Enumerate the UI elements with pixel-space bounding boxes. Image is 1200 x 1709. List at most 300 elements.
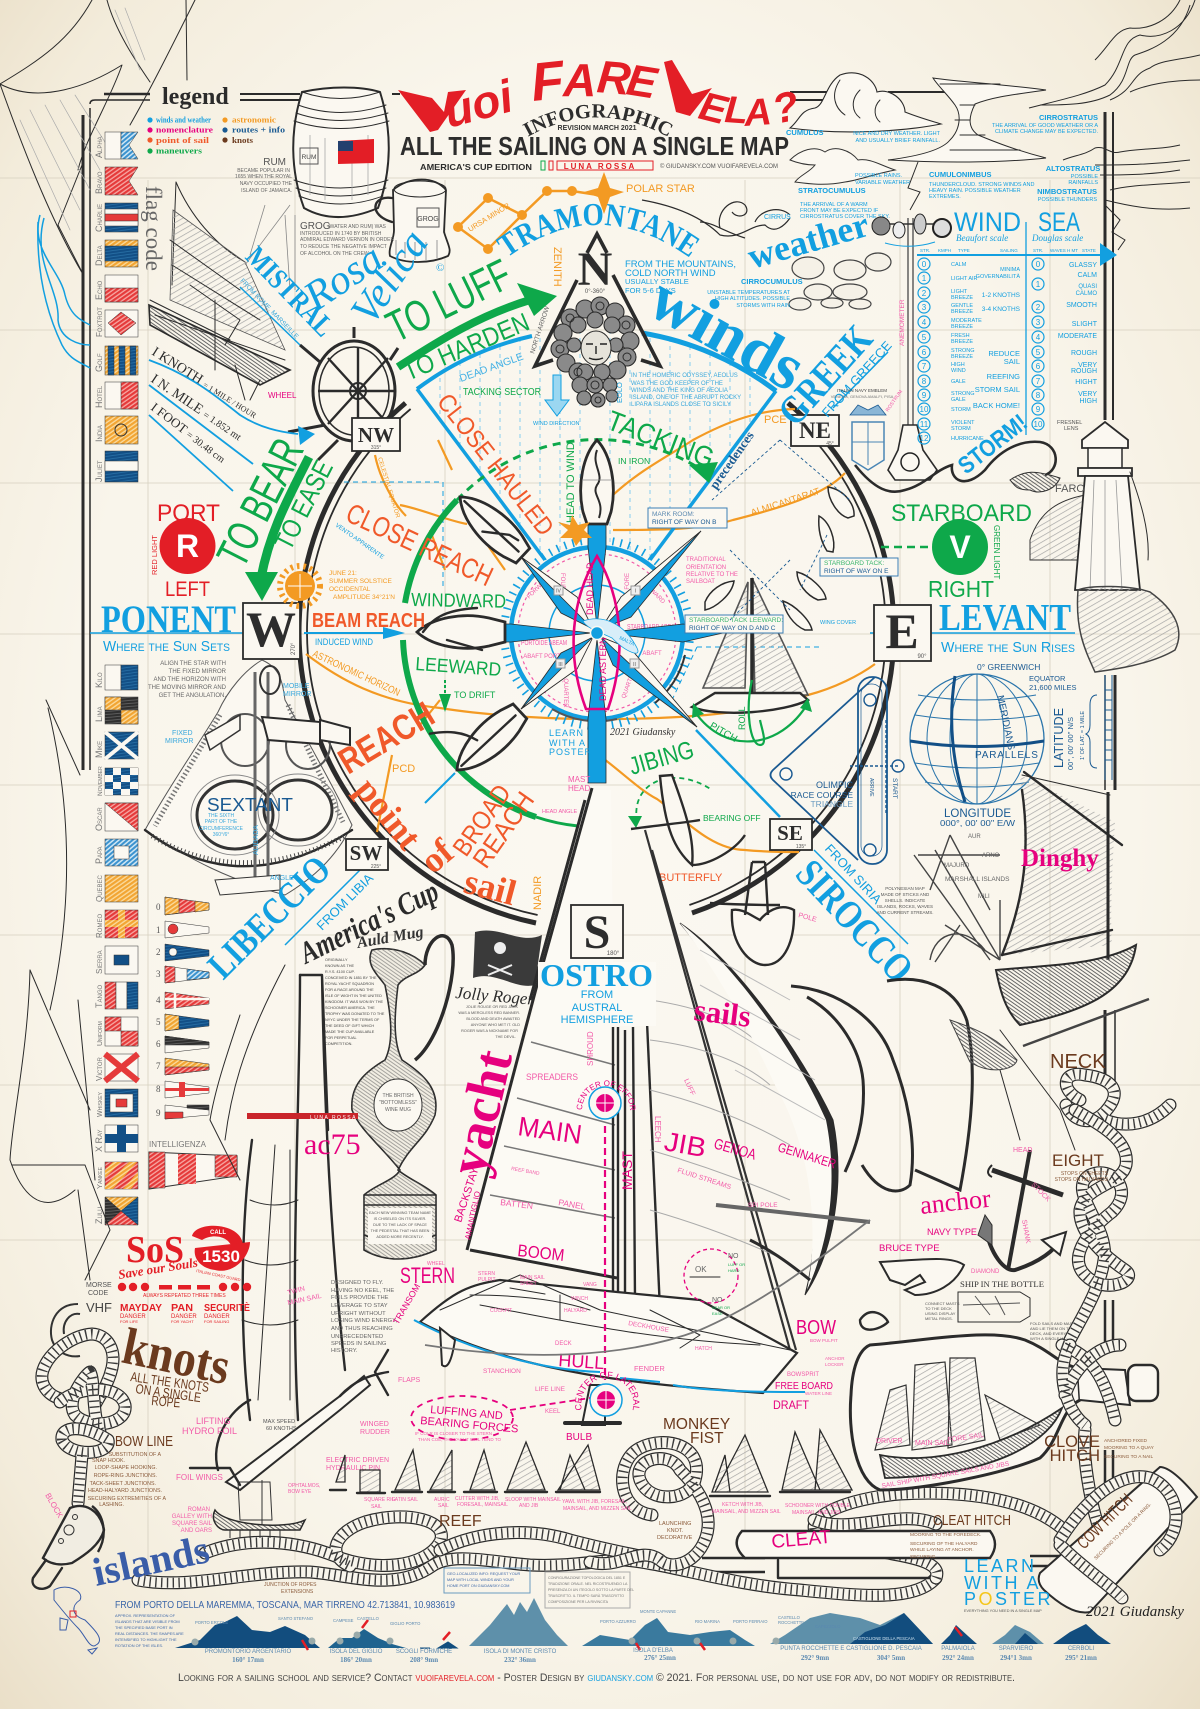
yacht part labels: DECKHOUSE (628, 1320, 670, 1334)
ac75 labels: HYDRO FOIL (182, 1426, 237, 1436)
table numbers: 2 (922, 289, 927, 298)
globe labels: 00°, 00' 00" N/S (1066, 717, 1075, 770)
title block: INFOGRAPHIC (522, 104, 673, 136)
fluid streams ok detail: BEAR OR (712, 1305, 730, 1310)
illustration: flag code sailboat (149, 182, 295, 400)
small labels: CAMPESE (333, 1618, 354, 1623)
ac75 description (331, 1280, 397, 1354)
starboard light (881, 500, 1032, 602)
table numbers: 5 (922, 333, 927, 342)
cardinal southwest: SW (350, 841, 382, 865)
sailing rig types (336, 1430, 852, 1492)
sextant label: SEXTANT (207, 795, 293, 815)
reach: REACH (331, 693, 441, 782)
boat A (819, 516, 834, 552)
rose ticks and rings (504, 540, 690, 726)
outer sailing circle (299, 403, 894, 923)
solstice note (329, 570, 395, 601)
globe labels: LATITUDE (1051, 708, 1066, 768)
fluid streams ok detail: OK (695, 1265, 707, 1274)
sextant part labels: MIRROR (165, 738, 193, 745)
neck stopper rope (1066, 1074, 1170, 1124)
island name captions: ISOLA D'ELBA (633, 1648, 673, 1654)
spinnaker curves (807, 997, 864, 1172)
anchor labels (971, 1147, 1052, 1275)
clove hitch label: SECURING TO A NAIL (1104, 1454, 1153, 1460)
north arrow label: NORTH ARROW (529, 305, 551, 355)
emergency calls: MAYDAY (120, 1303, 162, 1314)
yacht major labels: JIB (662, 1126, 709, 1163)
boat E (783, 601, 812, 630)
dashed centre line (604, 1126, 606, 1380)
learn with a poster small: POSTER (549, 747, 592, 757)
cleat (737, 1527, 995, 1578)
monkey fist label (663, 1416, 730, 1447)
island name captions: PROMONTORIO ARGENTARIO (205, 1649, 292, 1655)
small labels: ROCCHETTE (778, 1620, 804, 1625)
flag names A-J: Delta (94, 245, 104, 266)
rudder and keel (440, 1328, 605, 1425)
cardinal northeast: NE (799, 418, 831, 443)
beaufort types: HIGH (951, 362, 965, 368)
yacht part labels: SPI POLE (748, 1202, 778, 1209)
reef upper right strand (440, 1533, 640, 1556)
map labels (944, 834, 1010, 900)
flag names A-J: Golf (94, 353, 104, 372)
all the knots subtitle: ALL THE KNOTS (130, 1369, 210, 1395)
island bearings: 232° 36mn (504, 1656, 536, 1664)
ponent wind: PONENT (101, 598, 236, 641)
tramontane description: FOR 5-6 DAYS (625, 286, 676, 295)
island: elba (582, 1618, 755, 1646)
morse label: MORSE (86, 1282, 112, 1289)
cloud labels: HIGH ALTITUDES. POSSIBLE (715, 296, 790, 302)
italy outline (54, 1587, 100, 1654)
rig labels: AURIC (434, 1497, 450, 1503)
pitch and roll arrows: ROLL (737, 706, 747, 730)
winds heading: winds (638, 261, 817, 405)
polar star and ursa minor (453, 172, 695, 254)
yacht part labels: WINCH (571, 1296, 588, 1302)
pennant 3 (165, 966, 209, 983)
ac75 labels: MAIN SAIL (287, 1293, 322, 1307)
ac75 labels: MAX SPEED (263, 1419, 295, 1425)
yacht part labels: SHROUD (586, 1031, 595, 1066)
rum text: BECAME POPULAR IN (237, 168, 290, 174)
table headers: SAILING (1000, 248, 1018, 253)
pennant numbers: 6 (156, 1039, 161, 1049)
roman numeral markers: II (633, 662, 636, 668)
pennant 1 (165, 921, 209, 938)
solstice note: JUNE 21: (329, 570, 357, 577)
luna rossa boom stripe (247, 1113, 358, 1121)
globe labels: 1' OF LAT. = 1 MILE (1080, 711, 1086, 760)
cloud labels: STRATOCUMULUS (798, 186, 866, 195)
bowline rope (42, 1334, 113, 1405)
yacht part labels: WHEEL (427, 1261, 445, 1267)
cardinal east: 90° (917, 654, 927, 660)
approx text: REAL DISTANCES. THE SHAPES ARE (115, 1631, 184, 1636)
america's cup history text: MADE THE CUP AVAILABLE (325, 1030, 375, 1034)
to drift arrow: TO DRIFT (454, 690, 496, 700)
vhf label: VHF (86, 1300, 112, 1315)
title lettering: ? (768, 81, 803, 133)
dead angle labels (458, 351, 541, 398)
cloud labels: CIRROSTRATUS COVER THE SKY. (800, 214, 890, 220)
bowline heading and text: SUBSTITUTION OF A (109, 1452, 161, 1458)
title flag letter V right (664, 60, 712, 116)
mistral wind: FROM ROME, MARSEILLE (239, 278, 300, 341)
luffing and bearing forces: THAN COE, THE YACHT WILL TEND TO (418, 1437, 502, 1442)
flag whiskey (105, 1089, 138, 1117)
fluid streams ok detail (684, 1249, 745, 1316)
title lettering: R (595, 50, 633, 105)
yacht major labels: AMANTIGLIO (463, 1190, 482, 1240)
cloud labels: AND USUALLY BRIEF RAINFALL. (856, 138, 940, 144)
table numbers: 6 (1036, 362, 1041, 371)
S cardinal box (571, 905, 623, 959)
solstice note: AMPLITUDE 34°21'N (333, 593, 395, 601)
cardinal northwest (352, 418, 400, 451)
rum text: ISLAND OF JAMAICA. (241, 188, 292, 194)
pink sector labels: STARBOARD ABEAM (627, 624, 679, 631)
island: punta rocchette (770, 1613, 933, 1644)
wind direction arrow (533, 375, 579, 427)
beaufort types: GALE (951, 379, 966, 385)
legend items: point of sail (156, 135, 210, 145)
jolly roger caption: ROGER WAS A NICKNAME FOR (461, 1029, 518, 1033)
ac75 description: SPEEDS IN SAILING (331, 1341, 387, 1347)
map labels: MARSHALL ISLANDS (945, 876, 1010, 883)
cloud labels: CUMULONIMBUS (929, 170, 992, 179)
island bearings: 304° 5mn (877, 1654, 905, 1662)
ac75 labels: ELECTRIC DRIVEN (326, 1457, 389, 1464)
pitch and roll arrows (692, 680, 812, 745)
pink sector labels: FORWARD (640, 579, 666, 606)
yacht major labels: GENOA (712, 1136, 758, 1164)
starboard tack box: STARBOARD TACK: (824, 560, 885, 567)
starboard tack leeward box (685, 615, 783, 633)
cardinal southeast: 135° (796, 844, 806, 850)
astronomic orange curves (306, 409, 875, 852)
mast head labels: MAST (568, 775, 590, 784)
eolo description: WINDS AND THE KING OF AEOLIA (631, 388, 728, 394)
rum label: RUM (302, 154, 316, 161)
rig: cutter (470, 1450, 495, 1490)
polynesian caption: MADE OF STICKS AND (881, 892, 930, 897)
table numbers: 3 (1036, 318, 1041, 327)
rosa velica lettering (295, 222, 444, 333)
ship sail labels: SAIL SHIP WITH SQUARE SAILS AND JIBS (881, 1461, 1010, 1490)
greek wind: FROM GREECE (819, 338, 895, 420)
starboard tack box (820, 558, 898, 576)
cloud labels: NIMBOSTRATUS (1037, 187, 1097, 196)
flag code column A-J (94, 132, 138, 482)
flag names K-Z: Uniform (97, 1021, 104, 1046)
save our souls: Save our Souls (117, 1255, 199, 1282)
ship in the bottle small diagram: WITH A SINGLE WIRE (1030, 1336, 1071, 1341)
boat B (828, 487, 854, 518)
america's cup history text: FOR PERPETUAL (325, 1036, 357, 1040)
wheel and mile notes (148, 327, 398, 491)
jolly roger flag (455, 930, 542, 1039)
bowline heading and text: TACK-SHEET JUNCTIONS. (90, 1481, 156, 1487)
flag names K-Z: X Ray (94, 1129, 104, 1152)
running: RUNNING (588, 814, 611, 916)
ship in the bottle small diagram: FOLD SAILS AND MASTS (1030, 1321, 1078, 1326)
shackle (860, 1312, 888, 1330)
pennant 5 (165, 1014, 209, 1031)
cardinal northwest: 315° (371, 445, 381, 451)
fresnel lens label: LENS (1064, 426, 1079, 432)
island bearings: 186° 20mn (340, 1656, 372, 1664)
beaufort types: VIOLENT (951, 420, 975, 426)
beaufort types: HURRICANE (951, 436, 984, 442)
ostro wind: FROM (581, 989, 613, 1001)
bowline heading and text: SNAP HOOK. (92, 1458, 125, 1464)
island bearings: 294°1 3mn (1000, 1654, 1032, 1662)
weather heading: weather (743, 204, 873, 277)
rig labels: MAINSAIL, AND MIZZEN SAIL (563, 1506, 632, 1512)
vhf ring (51, 1304, 80, 1356)
flag names K-Z: Lima (94, 706, 104, 722)
beam reach: BEAM REACH (312, 610, 425, 632)
nadir: NADIR (532, 876, 544, 910)
contact note box: MAP WITH LOCAL WINDS AND YOUR (447, 1578, 514, 1582)
center of lateral resistance label (581, 1378, 633, 1412)
learn with a poster logo (964, 1556, 1053, 1613)
contact note box: HOME PORT ON GIUDANSKY.COM (447, 1584, 509, 1588)
spinnaker pole (716, 1205, 870, 1222)
scale names: Beaufort scale (956, 233, 1008, 243)
america's cup history text: ISLE OF WIGHT IN THE UNITED (325, 994, 382, 998)
polynesian map (914, 834, 1010, 962)
port light: RED LIGHT (150, 535, 159, 575)
beaufort types: LIGHT (951, 289, 968, 295)
small text precedences: precedences (706, 428, 757, 492)
cleat hitch rope (814, 1493, 1064, 1578)
pennant numbers: 2 (156, 947, 160, 957)
main yacht sail plan: CENTER OF EFFORT (576, 1080, 636, 1110)
compass rose (504, 521, 732, 783)
center of effort label (582, 1086, 630, 1110)
cloud labels: POSSIBLE (1071, 174, 1098, 180)
anchor labels: SHANK (1020, 1219, 1031, 1244)
ac75 racing yacht (176, 975, 421, 1490)
small labels: PORTO ERCOLE (195, 1620, 228, 1625)
luffing and bearing forces: LUFFING AND (430, 1404, 503, 1422)
trophy caption (379, 1093, 417, 1113)
cardinal east (874, 603, 931, 661)
table numbers: 9 (922, 391, 927, 400)
jolly roger title: Jolly Roger (455, 983, 535, 1009)
flag names A-J: India (94, 425, 104, 442)
flag names A-J: Hotel (94, 385, 104, 408)
flag names A-J: Foxtrot (95, 307, 104, 337)
rosa velica lettering: © (436, 262, 444, 274)
pink sector labels: FORWARD (526, 574, 553, 600)
table headers: STATE (1082, 248, 1096, 253)
grog text: (WATER AND RUM) WAS (328, 224, 387, 230)
yacht part labels: LEECH (653, 1116, 662, 1143)
america's cup history text: ROYAL YACHT SQUADRON (325, 982, 374, 986)
sea states: SLIGHT (1072, 321, 1098, 328)
leeward: LEEWARD (415, 654, 502, 681)
layline dashed routes (712, 440, 850, 620)
jibing block: BEARING OFF (703, 813, 761, 823)
emergency notes: DANGER (171, 1314, 197, 1320)
solstice note: SUMMER SOLSTICE (329, 578, 393, 585)
yacht major labels: STERN (400, 1263, 455, 1288)
roman galley: BOW EYE (288, 1489, 312, 1495)
flag papa (105, 839, 138, 866)
port light: R (176, 528, 199, 564)
table numbers: 1 (1036, 280, 1041, 289)
cloud labels: CIRROSTRATUS (1039, 113, 1098, 122)
yacht part labels: FENDER (634, 1364, 665, 1373)
yacht major labels: BULB (566, 1432, 592, 1443)
learn with a poster logo: LEARN (964, 1556, 1037, 1576)
dead head and dead astern labels: DEAD ASTERN (598, 637, 608, 701)
rig labels: SQUARE RIG (364, 1497, 396, 1503)
beaufort types: STORM (951, 407, 971, 413)
table headers: STR. (1033, 248, 1043, 253)
sextant caption: CIRCUMFERENCE (199, 826, 244, 832)
table numbers: 2 (1036, 303, 1041, 312)
ship in the bottle small diagram: AND LIE THEM ON THE (1030, 1326, 1074, 1331)
globe labels (940, 662, 1086, 828)
beaufort types: BREEZE (951, 309, 973, 315)
greek wind: GREEK (769, 316, 881, 434)
wind heading: WIND (954, 207, 1021, 237)
cloud labels: THE ARRIVAL OF A WARM (800, 202, 868, 208)
ostro wind: HEMISPHERE (561, 1014, 633, 1026)
tramontane description: USUALLY STABLE (625, 277, 689, 286)
map labels: MILI (978, 894, 990, 900)
table numbers (920, 260, 1043, 443)
flag names A-J: Bravo (94, 171, 104, 194)
yacht major labels: BOOM (517, 1241, 565, 1265)
eight knot rope (1070, 1110, 1129, 1340)
launching knot note (657, 1521, 693, 1541)
yacht major labels (391, 1111, 838, 1443)
anchor labels: STOCK (1030, 1181, 1052, 1204)
table numbers: 1 (922, 274, 927, 283)
sheet rope lines (425, 1220, 870, 1355)
blue induced wind arrow (304, 627, 405, 639)
learn with a poster logo: POSTER (964, 1589, 1053, 1609)
title lettering: F (528, 50, 569, 113)
globe labels: EQUATOR (1029, 674, 1066, 683)
cow hitch rope (1060, 1477, 1176, 1598)
ship wheel (288, 327, 398, 460)
flag golf (105, 346, 138, 375)
mast head labels (542, 775, 590, 815)
north cardinal letter: 0°-360° (585, 289, 606, 295)
storm lettering: STORM! (953, 409, 1033, 480)
table numbers: 11 (920, 420, 929, 429)
sailing advice: GOVERNABILITÀ (976, 273, 1020, 280)
map labels: ARNO (982, 853, 1000, 859)
fresnel lens label (1057, 420, 1082, 432)
polynesian caption: POLYNESIAN MAP (885, 886, 925, 891)
sextant part labels: MOBILE (283, 683, 310, 690)
emergency notes: DANGER (204, 1314, 230, 1320)
america's cup history text: CONCEIVED IN 1851 BY THE (325, 976, 377, 980)
cleat label: CLEAT (771, 1527, 832, 1553)
flag sierra (105, 946, 138, 974)
sailboat northwest close hauled (449, 485, 534, 568)
america's cup history text: COMPETITION. (325, 1042, 352, 1046)
flag names K-Z: November (97, 766, 104, 796)
flag kilo (105, 665, 138, 690)
sextant part labels: MIRROR (283, 691, 311, 698)
flag lima (105, 697, 138, 724)
illustration: top-left ship sails (0, 0, 195, 276)
starboard tack leeward box: RIGHT OF WAY ON D AND C (689, 625, 776, 632)
island name captions: ISOLA DEL GIGLIO (330, 1649, 383, 1655)
navy type: NAVY TYPE (927, 1227, 977, 1238)
beaufort types: STORM (951, 426, 971, 432)
beaufort types: BREEZE (951, 324, 973, 330)
in iron label: IN IRON (618, 456, 650, 466)
table numbers: 4 (1036, 333, 1041, 342)
ship in the bottle small diagram: CONNECT MASTS (925, 1301, 960, 1306)
beaufort types: MODERATE (951, 318, 982, 324)
yacht part labels: COCKPIT (490, 1308, 512, 1314)
luna rossa boom stripe: LUNA ROSSA (310, 1115, 357, 1121)
pink sector labels: QUARTER (562, 678, 568, 708)
flag names A-J (94, 136, 104, 482)
cloud labels: HEAVY RAIN. POSSIBLE WEATHER (929, 188, 1021, 194)
sailing advice: 3-4 KNOTHS (982, 306, 1021, 313)
tacking lettering: TACKING (603, 405, 719, 474)
ac75 description: UPRIGHT WITHOUT (331, 1311, 386, 1317)
emergency notes: DANGER (120, 1314, 146, 1320)
ship in the bottle small diagram: DECK, AND EVERYTHING (1030, 1331, 1079, 1336)
sea states: VERY (1078, 362, 1097, 369)
dead angle labels: DEAD ANGLE (458, 351, 525, 385)
pennant numbers: 0 (156, 902, 161, 912)
island name captions: PUNTA ROCCHETTE E CASTIGLIONE D. PESCAIA (780, 1646, 922, 1652)
clove hitch label: ANCHORED FIXED (1104, 1438, 1147, 1444)
fluid streams ok detail: HARD (728, 1268, 739, 1273)
legend items: maneuvers (156, 146, 203, 156)
all the knots subtitle: ON A SINGLE (135, 1381, 202, 1405)
wind and sea table (917, 207, 1117, 444)
butterfly boat upper (631, 775, 745, 865)
pink sector labels: ABAFT (642, 651, 662, 657)
ac75 labels: 60 KNOTHS (266, 1426, 297, 1432)
flag names A-J: Echo (94, 280, 104, 300)
eight knot label: STOPS ON HALYARDS (1055, 1177, 1109, 1183)
illustration: sextant (145, 660, 352, 895)
emergency notes: FOR YACHT (171, 1319, 194, 1324)
flag code heading: flag code (141, 186, 166, 271)
reef note: JUNCTION OF ROPES (264, 1582, 317, 1588)
broad reach: BROAD (446, 779, 517, 861)
ship sail labels (876, 1432, 1010, 1490)
pitch and roll arrows: PITCH (708, 721, 739, 745)
title lettering: L (723, 89, 749, 133)
eolo description: IN THE HOMERIC ODYSSEY, AEOLUS (631, 373, 738, 379)
head to wind label: HEAD TO WIND (565, 442, 577, 523)
coast guard phone icon: ITALIAN COAST GUARD (196, 1268, 241, 1282)
rig labels: LATIN SAIL (392, 1497, 418, 1503)
cleat hitch label: MOORING TO THE FOREDECK. (910, 1532, 981, 1538)
america's cup history text: R.Y.S. £100 CUP. (325, 970, 355, 974)
tramontane description: COLD NORTH WIND (625, 268, 716, 279)
